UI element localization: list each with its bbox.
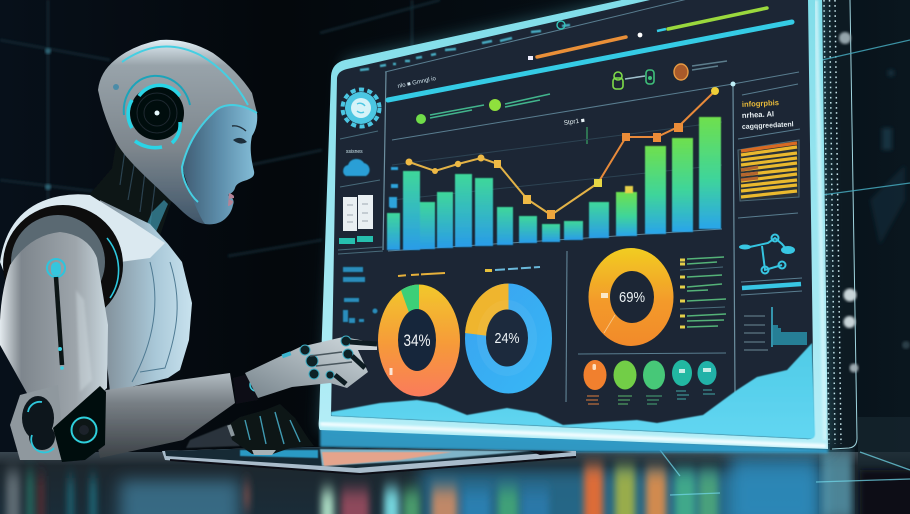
donut chart: 24% (465, 267, 552, 394)
right column: heading and text: cagqgreedatenl (742, 121, 794, 131)
status lights with caption lines (416, 94, 587, 144)
bar chart with line overlay (387, 82, 736, 251)
chart divider (566, 251, 567, 402)
glowing lower frame (320, 424, 826, 446)
lips (228, 193, 234, 206)
wrist (233, 373, 262, 404)
screen frame glow (319, 0, 829, 453)
icon: brain (625, 61, 727, 80)
donut chart: 34% (378, 273, 460, 396)
pointing hand (245, 336, 377, 398)
robot figure (0, 40, 377, 462)
donut legend (680, 257, 726, 327)
right column: heading and text (738, 84, 800, 139)
shoulder (0, 194, 165, 325)
donut chart: 69%: 69% (619, 289, 645, 306)
tablet on table (162, 447, 576, 474)
icon: document cards (343, 195, 373, 231)
right column: heading and text: infogrpbis (742, 98, 779, 109)
table surface with reflections (0, 417, 910, 514)
forearm (88, 373, 235, 458)
elbow joint (53, 386, 106, 462)
network diagram (738, 213, 798, 274)
donut chart: 69% (588, 248, 674, 346)
screen interior (331, 0, 814, 439)
shadow under forearm (186, 424, 240, 448)
mini histogram (744, 307, 807, 350)
left sidebar: ssisnes (346, 149, 363, 155)
bars (387, 117, 721, 250)
helmet trim (122, 46, 257, 202)
top status strip: nlo ■ Gmngl io (397, 76, 437, 90)
status lights with caption lines: Stpr1 ■ (563, 117, 585, 127)
face (182, 105, 257, 224)
icon: padlocks (613, 70, 654, 89)
top status strip (360, 0, 799, 393)
head (98, 40, 257, 224)
wave area chart (331, 343, 815, 439)
neck wires (88, 138, 172, 242)
icon: gear (342, 90, 380, 126)
trend line (409, 158, 598, 215)
helmet (98, 40, 257, 224)
back joint (10, 385, 65, 460)
donut chart: 34%: 34% (404, 331, 430, 350)
panel: dashboard screen (319, 0, 829, 453)
right column: heading and text: nrhea. AI (742, 109, 774, 120)
cyan meter (741, 278, 802, 295)
torso seams (132, 262, 177, 382)
ear sensor ring (113, 76, 190, 148)
donut chart: 24%: 24% (494, 330, 520, 347)
left sidebar (338, 90, 383, 323)
upper arm (0, 232, 108, 436)
metric circles (584, 360, 716, 404)
lower hand on tablet (228, 404, 314, 455)
eye and brow (232, 126, 247, 144)
icon: cloud (343, 159, 370, 176)
striped yellow chart block (738, 140, 799, 201)
torso (100, 200, 192, 392)
dotted side strip of the screen (820, 0, 910, 450)
